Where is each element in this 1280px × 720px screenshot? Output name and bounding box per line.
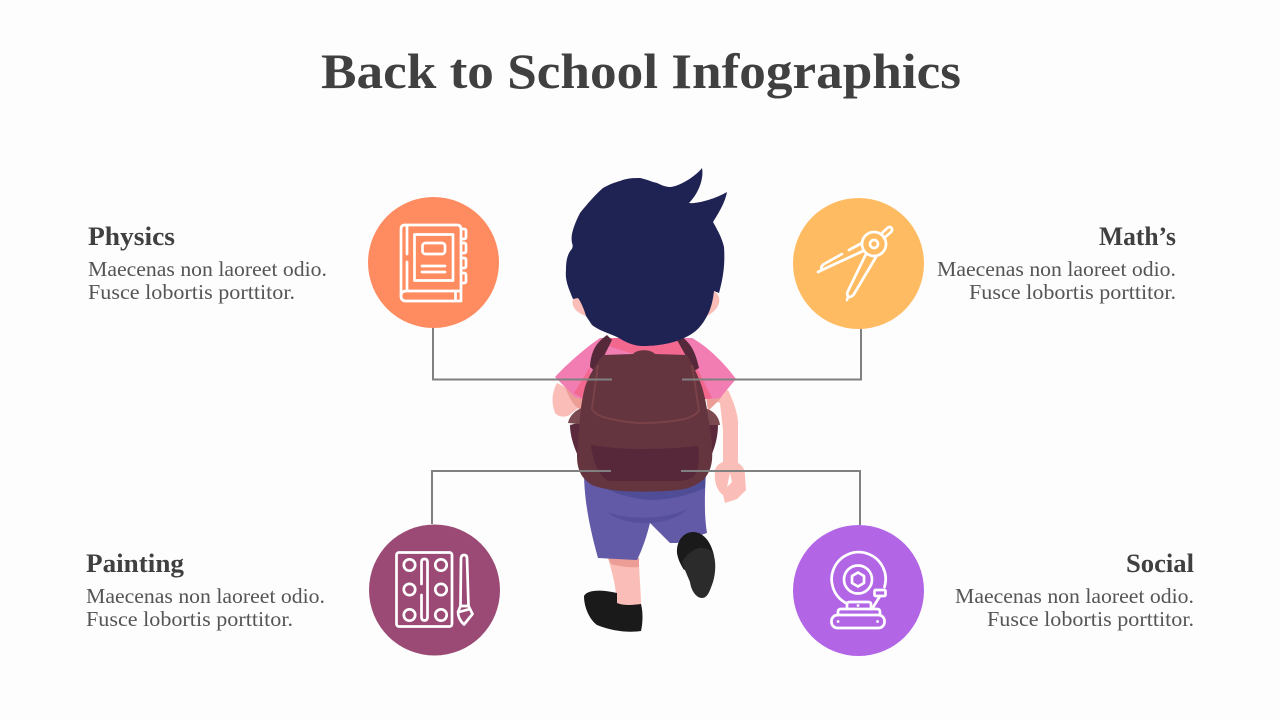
description line 1: Maecenas non laoreet odio. xyxy=(955,584,1194,608)
side pocket left xyxy=(570,420,590,456)
front shoe xyxy=(584,591,642,632)
connector: painting to backpack xyxy=(432,471,611,524)
left under-sleeve shade xyxy=(565,387,584,410)
badge circle xyxy=(793,198,924,329)
right arm and hand xyxy=(706,390,746,503)
badge circle xyxy=(369,524,500,656)
shorts xyxy=(584,470,707,560)
shirt xyxy=(555,338,736,399)
palette glyph xyxy=(396,552,472,626)
book glyph xyxy=(401,225,466,301)
description line 1: Maecenas non laoreet odio. xyxy=(86,584,325,608)
heading: physics: Physics xyxy=(88,222,175,251)
text block: social xyxy=(955,549,1194,631)
left ear xyxy=(572,297,590,316)
backpack pocket xyxy=(591,445,699,481)
icon: painting palette xyxy=(369,524,500,656)
back shoe xyxy=(677,532,714,570)
description line 2: Fusce lobortis porttitor. xyxy=(987,607,1194,631)
description line 1: Maecenas non laoreet odio. xyxy=(88,257,327,281)
right ear xyxy=(700,291,719,316)
collar xyxy=(600,338,690,356)
heading: social: Social xyxy=(1126,549,1194,578)
bell glyph xyxy=(832,552,886,628)
side pocket right flap xyxy=(698,409,720,425)
shirt inner shade right xyxy=(690,360,712,400)
title: Back to School Infographics xyxy=(321,43,961,99)
shorts fold xyxy=(607,509,687,523)
left arm xyxy=(553,383,584,417)
description line 2: Fusce lobortis porttitor. xyxy=(969,280,1176,304)
back shoe sole xyxy=(682,548,715,598)
backpack body xyxy=(577,350,712,492)
leg xyxy=(608,558,641,607)
connector: math to backpack xyxy=(682,328,861,380)
text block: painting xyxy=(86,549,325,631)
backpack straps xyxy=(590,335,699,372)
heading: math: Math’s xyxy=(1099,222,1176,251)
icon: social bell xyxy=(793,525,924,656)
description line 2: Fusce lobortis porttitor. xyxy=(86,607,293,631)
backpack flap line xyxy=(592,365,699,423)
shirt inner shade left xyxy=(574,367,592,399)
badge circle xyxy=(793,525,924,656)
icon: physics book xyxy=(368,197,499,328)
illustration: student with backpack xyxy=(553,168,746,632)
right under-sleeve shade xyxy=(706,396,722,411)
description line 1: Maecenas non laoreet odio. xyxy=(937,257,1176,281)
heading: painting: Painting xyxy=(86,549,184,578)
shorts waistband shadow xyxy=(585,470,706,500)
icon: math compass xyxy=(793,198,924,329)
connector: physics to backpack xyxy=(433,328,612,380)
badge circle xyxy=(368,197,499,328)
text block: math xyxy=(937,222,1176,304)
connector: social to backpack xyxy=(681,471,860,525)
compass glyph xyxy=(818,227,892,300)
collar highlight xyxy=(602,345,634,356)
side pocket left flap xyxy=(568,408,590,425)
side pocket right xyxy=(698,420,718,456)
leg shadow xyxy=(608,558,639,567)
text block: physics xyxy=(88,222,327,304)
hair xyxy=(566,168,727,346)
description line 2: Fusce lobortis porttitor. xyxy=(88,280,295,304)
